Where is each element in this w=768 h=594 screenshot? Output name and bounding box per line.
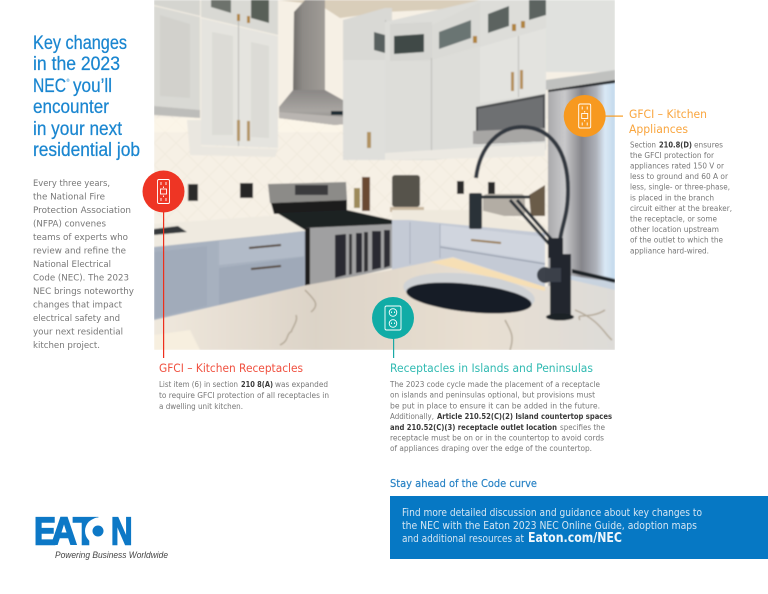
panel: call to action: [390, 496, 768, 559]
panel: GFCI kitchen appliances: ensures: [694, 140, 723, 149]
title: [33, 32, 140, 161]
intro text: the National Fire: [33, 192, 105, 202]
title: Key changes: [33, 32, 127, 54]
title: encounter: [33, 96, 109, 118]
panel: GFCI kitchen appliances: appliance hard-wired.: [630, 246, 709, 255]
panel: GFCI kitchen appliances: circuit either at the breaker,: [630, 204, 732, 213]
panel: GFCI kitchen appliances: 210.8(D): [659, 140, 692, 149]
logo: Eaton: A: [51, 510, 77, 554]
panel: receptacles in islands and peninsulas: on islands and peninsulas optional, but provisions must: [390, 391, 595, 400]
panel: GFCI kitchen receptacles: was expanded: [275, 380, 328, 389]
title: you’ll: [73, 75, 112, 97]
title: in the 2023: [33, 53, 120, 75]
intro text: (NFPA) convenes: [33, 220, 106, 230]
panel: receptacles in islands and peninsulas: receptacle must be on or in the countertop to avoid cords: [390, 433, 604, 442]
panel: call to action: and additional resources at: [402, 533, 524, 545]
title: in your next: [33, 118, 123, 140]
panel: GFCI kitchen appliances: Appliances: [629, 122, 688, 136]
panel: call to action: Eaton.com/NEC: [528, 530, 622, 546]
panel: GFCI kitchen receptacles: [159, 361, 329, 411]
logo: Eaton: T: [73, 510, 98, 554]
panel: GFCI kitchen appliances: is placed in the branch: [630, 193, 714, 202]
panel: GFCI kitchen appliances: of the outlet to which the: [630, 236, 723, 245]
panel: GFCI kitchen appliances: less, single- or three-phase,: [630, 183, 730, 192]
callout marker: receptacles in islands: [372, 297, 414, 358]
panel: receptacles in islands and peninsulas: be put in place to ensure it can be added in the future.: [390, 401, 600, 410]
panel: receptacles in islands and peninsulas: [389, 361, 612, 453]
panel: receptacles in islands and peninsulas: of appliances draping over the edge of the countertop.: [390, 444, 592, 453]
panel: receptacles in islands and peninsulas: Article 210.52(C)(2) Island countertop spaces: [437, 412, 612, 421]
panel: GFCI kitchen receptacles: GFCI – Kitchen Receptacles: [159, 361, 303, 375]
intro text: [33, 179, 134, 351]
panel: GFCI kitchen appliances: other location upstream: [630, 225, 719, 234]
panel: call to action: the NEC with the Eaton 2023 NEC Online Guide, adoption maps: [402, 520, 697, 532]
panel: receptacles in islands and peninsulas: and 210.52(C)(3) receptacle outlet location: [390, 423, 557, 432]
title: NEC: [33, 75, 66, 97]
panel: GFCI kitchen appliances: Section: [630, 140, 656, 149]
panel: GFCI kitchen appliances: [629, 107, 732, 255]
callout marker: GFCI kitchen receptacles: [142, 170, 184, 358]
panel: GFCI kitchen appliances: less to ground and 60 A or: [630, 172, 729, 181]
panel: GFCI kitchen appliances: GFCI – Kitchen: [629, 107, 707, 121]
panel: call to action: Find more detailed discussion and guidance about key changes to: [402, 507, 702, 519]
panel: receptacles in islands and peninsulas: The 2023 code cycle made the placement of a receptacle: [389, 380, 600, 389]
intro text: NEC brings noteworthy: [33, 287, 134, 297]
intro text: teams of experts who: [33, 233, 128, 243]
logo: Eaton: E: [34, 510, 56, 554]
callout marker: GFCI kitchen appliances: [564, 95, 623, 137]
panel: receptacles in islands and peninsulas: Additionally,: [390, 412, 434, 421]
panel: GFCI kitchen receptacles: List item (6) in section: [159, 380, 238, 389]
intro text: Protection Association: [33, 206, 131, 216]
intro text: Code (NEC). The 2023: [33, 274, 129, 284]
panel: GFCI kitchen receptacles: to require GFCI protection of all receptacles in: [159, 391, 329, 400]
intro text: your next residential: [33, 328, 123, 338]
icon: duplex outlet teal: [385, 306, 401, 330]
intro text: National Electrical: [33, 260, 111, 270]
panel: GFCI kitchen appliances: appliances rated 150 V or: [630, 162, 725, 170]
intro text: changes that impact: [33, 300, 123, 310]
logo: Eaton: Powering Business Worldwide: [55, 550, 168, 561]
icon: GFCI outlet red: [158, 180, 170, 204]
intro text: kitchen project.: [33, 341, 100, 351]
panel: receptacles in islands and peninsulas: specifies the: [560, 423, 605, 432]
logo: Eaton: O: [88, 510, 108, 554]
kitchen photo: [154, 0, 615, 350]
panel: GFCI kitchen appliances: the GFCI protection for: [630, 151, 715, 160]
logo: Eaton: N: [111, 510, 132, 554]
intro text: review and refine the: [33, 246, 126, 256]
heading: stay ahead: Stay ahead of the Code curve: [390, 477, 537, 490]
intro text: electrical safety and: [33, 314, 120, 324]
intro text: Every three years,: [33, 179, 110, 189]
panel: GFCI kitchen appliances: the receptacle, or some: [630, 214, 717, 224]
icon: GFCI outlet orange: [579, 104, 591, 128]
title: ®: [66, 78, 70, 83]
panel: GFCI kitchen receptacles: 210 8(A): [241, 380, 273, 389]
panel: receptacles in islands and peninsulas: Receptacles in Islands and Peninsulas: [390, 361, 593, 375]
logo: Eaton: [34, 510, 168, 561]
title: residential job: [33, 139, 140, 161]
panel: GFCI kitchen receptacles: a dwelling unit kitchen.: [159, 402, 243, 411]
